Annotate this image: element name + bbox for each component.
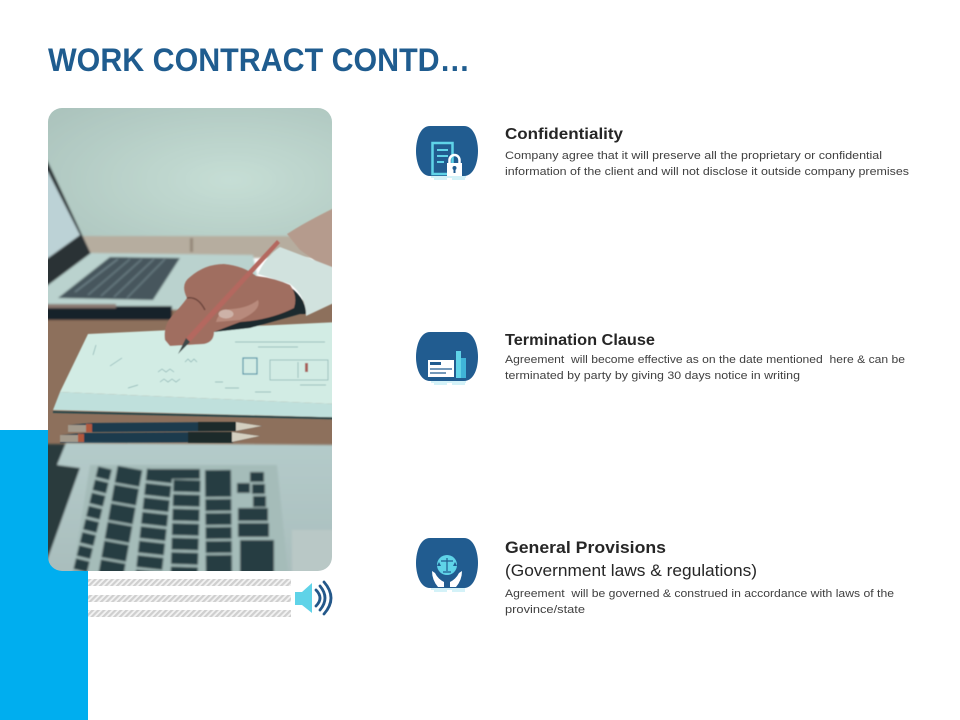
pens [68, 422, 262, 432]
photo: hand writing on paper beside laptops [48, 108, 332, 571]
text: general provisions description [505, 588, 894, 616]
subheading: Government laws and regulations: (Government laws & regulations) [505, 562, 757, 580]
decorative blue block [0, 430, 88, 720]
icon: speaker [295, 582, 331, 614]
text: general provisions description: Agreement will be governed & construed in accordance with laws of the [505, 588, 894, 600]
text: confidentiality description: information of the client and will not disclose it outside company premises [505, 166, 910, 178]
text: termination description: terminated by party by giving 30 days notice in writing [505, 370, 800, 382]
title: WORK CONTRACT CONTD… [48, 42, 470, 78]
icon: cheque and books [416, 332, 478, 384]
hatched bars [88, 579, 291, 617]
text: termination description [505, 354, 905, 382]
text: confidentiality description [505, 150, 910, 178]
heading: Termination Clause: Termination Clause [505, 332, 655, 349]
other hand and sleeve [287, 208, 332, 268]
text: termination description: Agreement will become effective as on the date mentioned here & can be [505, 354, 905, 366]
heading: Confidentiality: Confidentiality [505, 126, 623, 143]
icon: document with padlock [416, 126, 478, 179]
heading: General Provisions: General Provisions [505, 539, 666, 557]
icon: scales held in hands [416, 538, 478, 591]
text: confidentiality description: Company agree that it will preserve all the proprietary or confidential [505, 150, 882, 162]
text: general provisions description: province/state [505, 604, 585, 616]
